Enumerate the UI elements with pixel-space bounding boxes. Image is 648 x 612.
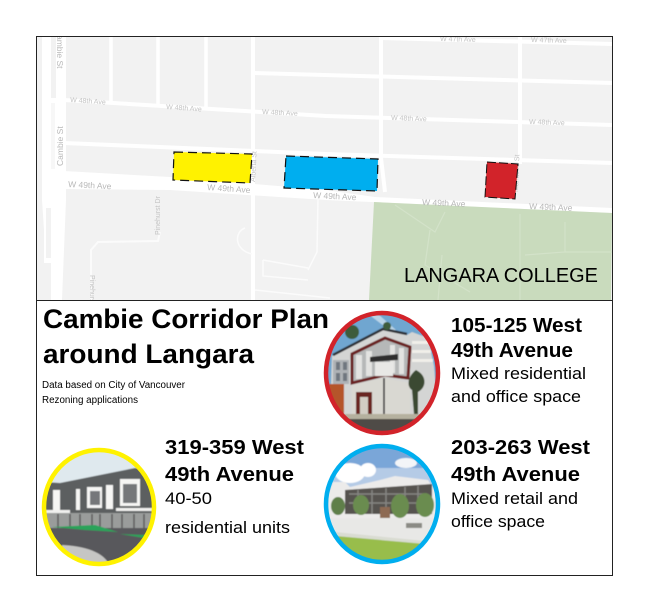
Cambie St road	[42, 36, 66, 300]
street labels: Cambie St	[55, 126, 65, 166]
title	[43, 304, 329, 369]
photo: 319-359 West 49th Avenue rendering	[42, 450, 156, 570]
photo: 203-263 West 49th Avenue rendering	[324, 444, 440, 564]
text: 319-359 West 49th Avenue: 40-50	[165, 490, 212, 508]
street labels: Manitoba St	[513, 154, 521, 192]
site marker: yellow block	[173, 152, 252, 183]
site marker: red block	[485, 162, 518, 199]
street labels: ambie St	[55, 35, 65, 69]
panel: map	[36, 35, 612, 305]
text: 203-263 West 49th Avenue	[451, 437, 590, 531]
street labels: W 48th Ave	[70, 97, 106, 106]
label: Langara College: LANGARA COLLEGE	[404, 265, 598, 287]
site marker: blue block	[284, 156, 378, 191]
source note	[42, 380, 186, 406]
text: 105-125 West 49th Avenue: and office space	[451, 388, 581, 406]
text: 105-125 West 49th Avenue	[451, 315, 586, 406]
street labels: W 49th Ave	[68, 179, 112, 191]
text: 319-359 West 49th Avenue: 49th Avenue	[165, 464, 294, 486]
street labels: W 49th Ave	[313, 190, 357, 202]
street labels: W 48th Ave	[529, 119, 565, 127]
street labels: Pinehurst Dr	[155, 195, 162, 235]
street labels: Alberta St	[250, 151, 259, 182]
street labels: W 48th Ave	[262, 109, 298, 118]
street labels: W 48th Ave	[391, 115, 427, 123]
text: 319-359 West 49th Avenue: 319-359 West	[165, 437, 304, 459]
street labels: W 48th Ave	[166, 104, 202, 113]
text: 105-125 West 49th Avenue: 105-125 West	[451, 315, 582, 337]
text: 203-263 West 49th Avenue: Mixed retail and	[451, 490, 578, 508]
W 49th Ave road	[64, 171, 612, 213]
text: 203-263 West 49th Avenue: 203-263 West	[451, 437, 590, 459]
text: 319-359 West 49th Avenue: residential units	[165, 519, 290, 537]
title: Cambie Corridor Plan	[43, 304, 329, 334]
street labels: W 47th Ave	[440, 36, 476, 44]
photo: 105-125 West 49th Avenue rendering	[324, 312, 440, 435]
Langara College grounds	[369, 202, 612, 300]
text: 105-125 West 49th Avenue: Mixed residential	[451, 365, 586, 383]
frame and divider	[36, 36, 612, 576]
street labels: Pinehurst	[88, 275, 95, 305]
title: around Langara	[43, 339, 255, 369]
source note: Rezoning applications	[42, 395, 138, 406]
infographic	[36, 36, 613, 576]
text: 105-125 West 49th Avenue: 49th Avenue	[451, 340, 573, 362]
text: 319-359 West 49th Avenue	[165, 437, 304, 537]
street labels: W 49th Ave	[529, 201, 573, 213]
text: 203-263 West 49th Avenue: 49th Avenue	[451, 464, 580, 486]
street labels: W 47th Ave	[531, 37, 567, 45]
street labels: W 49th Ave	[422, 197, 466, 209]
street labels: W 49th Ave	[207, 182, 251, 195]
street labels	[55, 35, 573, 305]
source note: Data based on City of Vancouver	[42, 380, 186, 391]
text: 203-263 West 49th Avenue: office space	[451, 513, 545, 531]
